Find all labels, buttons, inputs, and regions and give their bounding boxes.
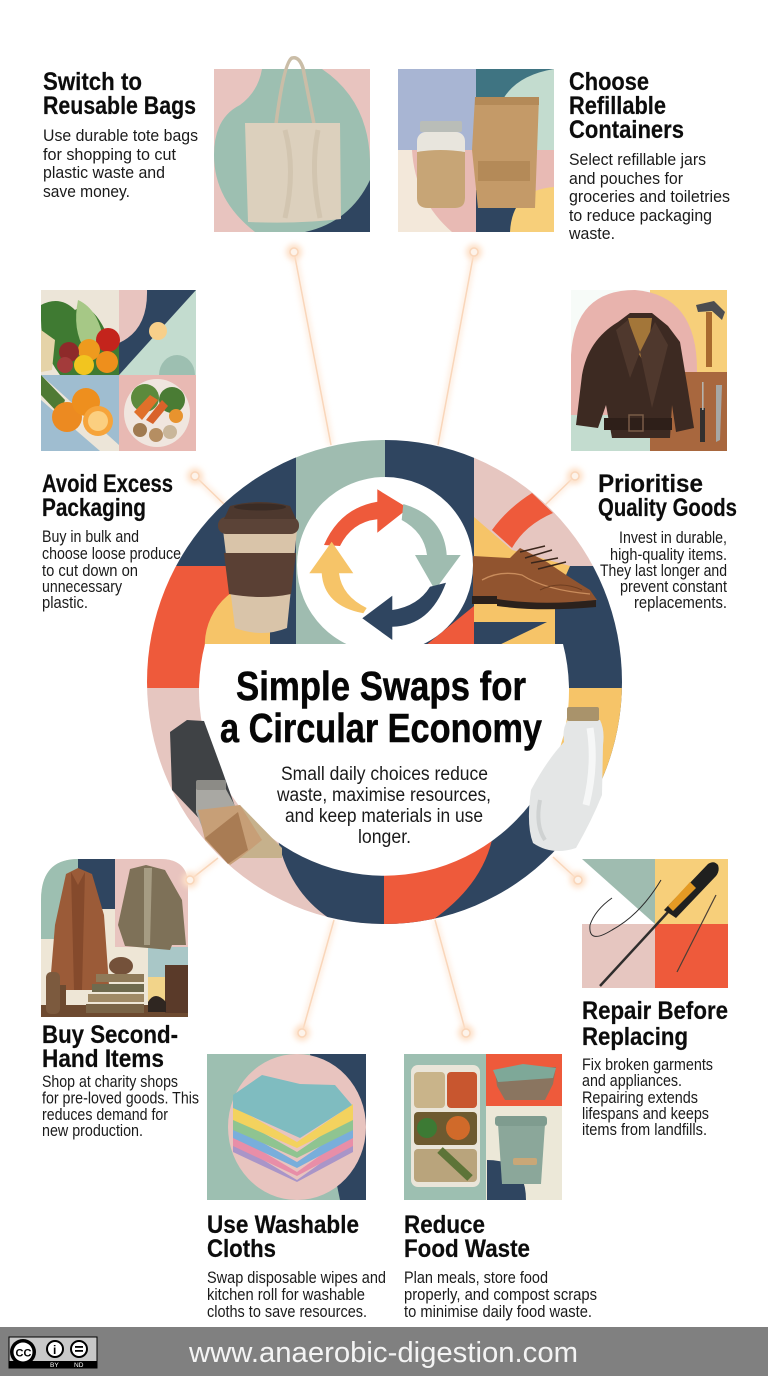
panel: quality goods image bbox=[571, 290, 727, 451]
icon: creative commons badge bbox=[9, 1337, 97, 1369]
text: second-hand items bbox=[42, 1072, 199, 1140]
icon: glass jar bbox=[529, 707, 604, 851]
panel: washable cloths image bbox=[207, 1054, 366, 1200]
text: avoid packaging bbox=[42, 527, 181, 612]
text: repair before replacing: Repairing extends bbox=[582, 1088, 698, 1107]
heading: reusable bags bbox=[43, 68, 196, 120]
text: washable cloths: cloths to save resources. bbox=[207, 1302, 367, 1321]
panel: food waste image bbox=[404, 1054, 562, 1200]
connector lines bbox=[190, 252, 578, 1033]
website url: www.anaerobic-digestion.com bbox=[188, 1337, 578, 1369]
title: Simple Swaps for bbox=[236, 663, 526, 709]
title: a Circular Economy bbox=[220, 705, 542, 751]
icon: creative commons badge: BY bbox=[50, 1362, 59, 1369]
text: repair before replacing: items from landfills. bbox=[582, 1120, 707, 1139]
heading: food waste bbox=[404, 1211, 530, 1263]
text: repair before replacing: lifespans and keeps bbox=[582, 1104, 709, 1123]
subtitle: and keep materials in use bbox=[285, 806, 483, 827]
connector dots bbox=[182, 244, 586, 1041]
central geometric ring bbox=[140, 430, 630, 933]
heading: quality goods bbox=[598, 470, 737, 522]
icon: jar and pouch bbox=[417, 97, 539, 208]
heading: repair before replacing bbox=[582, 997, 728, 1051]
icon: coffee cup bbox=[218, 502, 299, 633]
icon: tote bag bbox=[245, 58, 341, 223]
title bbox=[220, 663, 542, 751]
text: washable cloths bbox=[207, 1268, 386, 1321]
text: refillable containers: Select refillable jars bbox=[569, 150, 706, 169]
heading: washable cloths bbox=[207, 1211, 359, 1263]
text: repair before replacing: Fix broken garments bbox=[582, 1055, 713, 1074]
heading: refillable containers: Containers bbox=[569, 116, 684, 144]
text: second-hand items: new production. bbox=[42, 1121, 143, 1140]
panel: produce image bbox=[41, 290, 196, 451]
heading: second-hand items bbox=[42, 1021, 178, 1073]
text: repair before replacing bbox=[582, 1055, 713, 1139]
text: reusable bags: save money. bbox=[43, 182, 130, 201]
heading: washable cloths: Use Washable bbox=[207, 1211, 359, 1239]
heading: avoid packaging bbox=[42, 470, 173, 522]
heading: avoid packaging: Packaging bbox=[42, 494, 146, 522]
heading: refillable containers: Choose bbox=[569, 68, 649, 96]
icon: creative commons badge: CC bbox=[16, 1348, 31, 1360]
text: refillable containers: to reduce packaging bbox=[569, 206, 712, 225]
subtitle bbox=[276, 764, 491, 848]
text: refillable containers: groceries and toiletries bbox=[569, 187, 730, 206]
heading: food waste: Reduce bbox=[404, 1211, 485, 1239]
text: avoid packaging: to cut down on bbox=[42, 561, 138, 580]
text: washable cloths: Swap disposable wipes and bbox=[207, 1268, 386, 1287]
panel: tote bag image bbox=[214, 69, 370, 232]
panel: second-hand image bbox=[41, 859, 188, 1017]
text: washable cloths: kitchen roll for washable bbox=[207, 1285, 365, 1304]
text: quality goods: high-quality items. bbox=[610, 545, 727, 564]
subtitle: Small daily choices reduce bbox=[281, 764, 488, 785]
text: reusable bags bbox=[43, 126, 198, 201]
heading: repair before replacing: Repair Before bbox=[582, 997, 728, 1025]
text: quality goods: Invest in durable, bbox=[619, 528, 727, 547]
panel: refillable containers image bbox=[398, 69, 554, 232]
heading: second-hand items: Buy Second- bbox=[42, 1021, 178, 1049]
text: food waste bbox=[404, 1268, 597, 1321]
heading: quality goods: Prioritise bbox=[598, 470, 703, 498]
central white cutout bbox=[199, 477, 569, 876]
heading: second-hand items: Hand Items bbox=[42, 1045, 164, 1073]
text: avoid packaging: plastic. bbox=[42, 593, 88, 612]
icon: circular arrows bbox=[309, 489, 461, 640]
heading: reusable bags: Switch to bbox=[43, 68, 142, 96]
text: food waste: Plan meals, store food bbox=[404, 1268, 548, 1287]
text: reusable bags: plastic waste and bbox=[43, 163, 165, 182]
icon: screwdriver, needle and thread bbox=[590, 862, 719, 986]
text: quality goods bbox=[600, 528, 727, 612]
heading: quality goods: Quality Goods bbox=[598, 494, 737, 522]
heading: refillable containers: Refillable bbox=[569, 92, 666, 120]
heading: repair before replacing: Replacing bbox=[582, 1023, 688, 1051]
heading: washable cloths: Cloths bbox=[207, 1235, 276, 1263]
text: second-hand items: reduces demand for bbox=[42, 1105, 168, 1124]
subtitle: waste, maximise resources, bbox=[276, 785, 491, 806]
text: quality goods: replacements. bbox=[634, 593, 727, 612]
text: food waste: properly, and compost scraps bbox=[404, 1285, 597, 1304]
text: avoid packaging: choose loose produce bbox=[42, 544, 181, 563]
text: quality goods: They last longer and bbox=[600, 561, 727, 580]
text: reusable bags: for shopping to cut bbox=[43, 145, 176, 164]
icon: leather jacket and tools bbox=[576, 301, 725, 442]
heading: food waste: Food Waste bbox=[404, 1235, 530, 1263]
text: avoid packaging: unnecessary bbox=[42, 577, 122, 596]
heading: refillable containers bbox=[569, 68, 684, 144]
panel: repair image bbox=[582, 859, 728, 988]
icon: creative commons badge: i bbox=[53, 1343, 56, 1357]
text: quality goods: prevent constant bbox=[620, 577, 727, 596]
icon: stack of cloths bbox=[233, 1075, 353, 1182]
text: avoid packaging: Buy in bulk and bbox=[42, 527, 139, 546]
icon: second-hand clothes and books bbox=[46, 865, 188, 1015]
text: repair before replacing: and appliances. bbox=[582, 1071, 682, 1090]
heading: reusable bags: Reusable Bags bbox=[43, 92, 196, 120]
text: food waste: to minimise daily food waste. bbox=[404, 1302, 592, 1321]
text: second-hand items: for pre-loved goods. This bbox=[42, 1088, 199, 1108]
subtitle: longer. bbox=[358, 827, 411, 848]
icon: brogue shoe bbox=[472, 546, 597, 609]
text: refillable containers bbox=[568, 150, 730, 243]
text: refillable containers: waste. bbox=[568, 224, 615, 243]
text: second-hand items: Shop at charity shops bbox=[42, 1072, 178, 1091]
icon: meal box, container and compost bin bbox=[411, 1064, 556, 1187]
footer bar bbox=[0, 1327, 768, 1376]
icon: black pouch, jar and paper bbox=[170, 720, 282, 865]
heading: avoid packaging: Avoid Excess bbox=[42, 470, 173, 498]
icon: creative commons badge: ND bbox=[74, 1362, 84, 1369]
text: refillable containers: and pouches for bbox=[569, 169, 683, 188]
text: reusable bags: Use durable tote bags bbox=[43, 126, 198, 145]
